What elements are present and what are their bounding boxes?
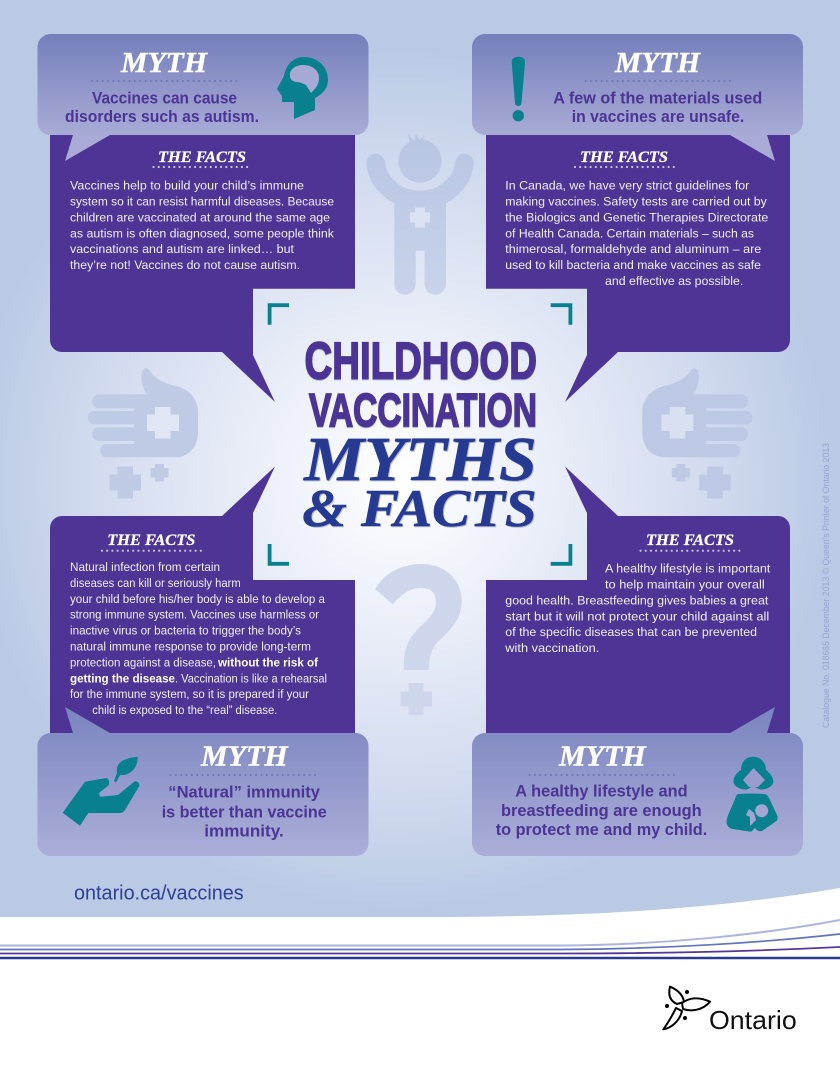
facts text: of the specific diseases that can be prevented [505, 625, 757, 639]
title line: myths and facts [302, 426, 537, 538]
facts text: inactive virus or bacteria to trigger the body’s [70, 624, 301, 638]
myth heading: MYTH [558, 742, 647, 773]
trillium mark [663, 987, 710, 1029]
facts text: protection against a disease, [70, 655, 216, 669]
icon: right hand with crosses [642, 368, 753, 498]
title line: myths and facts: & FACTS [302, 480, 537, 538]
facts heading: THE FACTS [580, 149, 668, 166]
facts box top left [50, 135, 355, 402]
facts text: to help maintain your overall [605, 577, 765, 591]
facts text [505, 178, 768, 288]
facts heading: THE FACTS [158, 149, 246, 166]
facts text: the Biologics and Genetic Therapies Directorate [505, 210, 768, 224]
myth statement: A healthy lifestyle and [515, 783, 688, 801]
myth statement [496, 783, 707, 839]
copyright notice: Catalogue No. 018665 December 2013 © Queen’s Printer of Ontario 2013 [821, 443, 832, 728]
facts text: used to kill bacteria and make vaccines as safe [505, 258, 761, 272]
myth statement [162, 784, 327, 841]
facts text: child is exposed to the “real” disease. [92, 703, 277, 717]
facts text: In Canada, we have very strict guidelines for [505, 178, 749, 192]
facts text: start but it will not protect your child against all [505, 609, 769, 623]
corner brackets around title [270, 305, 570, 564]
myth statement: A few of the materials used [553, 90, 762, 108]
title line: childhood vaccination [304, 332, 537, 436]
facts box bottom left [50, 466, 355, 733]
decorative swoosh lines [0, 920, 840, 958]
icon: child with raised arms [376, 133, 464, 295]
facts text: Natural infection from certain [70, 560, 220, 574]
website url: ontario.ca/vaccines [74, 881, 244, 904]
facts text: good health. Breastfeeding gives babies a great [505, 593, 769, 607]
facts text: system so it can resist harmful diseases. Because [70, 194, 334, 208]
myth statement: Vaccines can cause [92, 90, 237, 108]
myth statement: is better than vaccine [162, 803, 327, 821]
myth bubble top right [472, 34, 803, 161]
facts text: they’re not! Vaccines do not cause autism. [70, 258, 300, 272]
logo: Ontario trillium [663, 987, 797, 1035]
facts text: Vaccines help to build your child’s immune [70, 178, 304, 192]
myth statement: to protect me and my child. [496, 821, 707, 839]
title line: childhood vaccination: VACCINATION [309, 384, 537, 436]
myth statement: disorders such as autism. [65, 108, 259, 126]
panel: materials myth and facts [472, 34, 803, 402]
title line: myths and facts: MYTHS [303, 426, 537, 494]
myth heading: MYTH [614, 48, 701, 79]
facts text: as autism is often diagnosed, some people think [70, 226, 335, 240]
myth statement: in vaccines are unsafe. [572, 108, 744, 126]
facts text: and effective as possible. [605, 274, 743, 288]
facts box bottom right [486, 466, 790, 733]
icon: question mark with cross [375, 564, 462, 715]
facts text: without the risk of [217, 655, 319, 669]
icon: exclamation mark [512, 57, 525, 121]
facts text: with vaccination. [504, 641, 599, 655]
myth statement: immunity. [204, 823, 284, 841]
panel: autism myth and facts [38, 34, 368, 402]
facts heading: THE FACTS [107, 532, 195, 549]
facts text: of Health Canada. Certain materials – such as [505, 226, 754, 240]
icon: mother nursing child [726, 757, 778, 832]
icon: head with brain [277, 57, 328, 119]
facts text: making vaccines. Safety tests are carried out by [505, 194, 768, 208]
myth heading: MYTH [200, 742, 289, 773]
facts box top right [486, 135, 790, 402]
icon: hand holding leaf [63, 757, 139, 826]
myth bubble top left [38, 34, 368, 161]
facts text: natural immune response to provide long-term [70, 639, 311, 653]
facts text: children are vaccinated at around the same age [70, 210, 330, 224]
title line: childhood vaccination: CHILDHOOD [304, 332, 537, 390]
facts text: getting the disease [70, 671, 175, 685]
facts text: thimerosal, formaldehyde and aluminum – are [505, 242, 761, 256]
panel: natural immunity myth and facts [38, 466, 368, 856]
myth heading: MYTH [120, 48, 208, 79]
myth bubble bottom right [472, 707, 803, 856]
myth bubble bottom left [38, 707, 368, 856]
myth statement: “Natural” immunity [168, 784, 321, 802]
facts text: strong immune system. Vaccines use harmless or [70, 608, 319, 622]
icon: left hand with crosses [88, 368, 198, 498]
myth statement: breastfeeding are enough [501, 802, 702, 820]
facts text: your child before his/her body is able to develop a [70, 592, 325, 606]
facts text: A healthy lifestyle is important [605, 562, 771, 576]
panel: lifestyle and breastfeeding myth and facts [472, 466, 803, 856]
facts text [70, 178, 335, 272]
facts text: diseases can kill or seriously harm [70, 576, 241, 590]
facts text [504, 562, 771, 655]
title [302, 332, 537, 538]
facts text: for the immune system, so it is prepared if your [70, 687, 309, 701]
facts text: vaccinations and autism are linked… but [70, 242, 295, 256]
myth statement [553, 90, 762, 126]
wordmark: Ontario [709, 1005, 797, 1035]
myth statement [65, 90, 259, 126]
facts text: . Vaccination is like a rehearsal [175, 671, 327, 685]
facts heading: THE FACTS [646, 532, 734, 549]
facts text [70, 560, 327, 717]
